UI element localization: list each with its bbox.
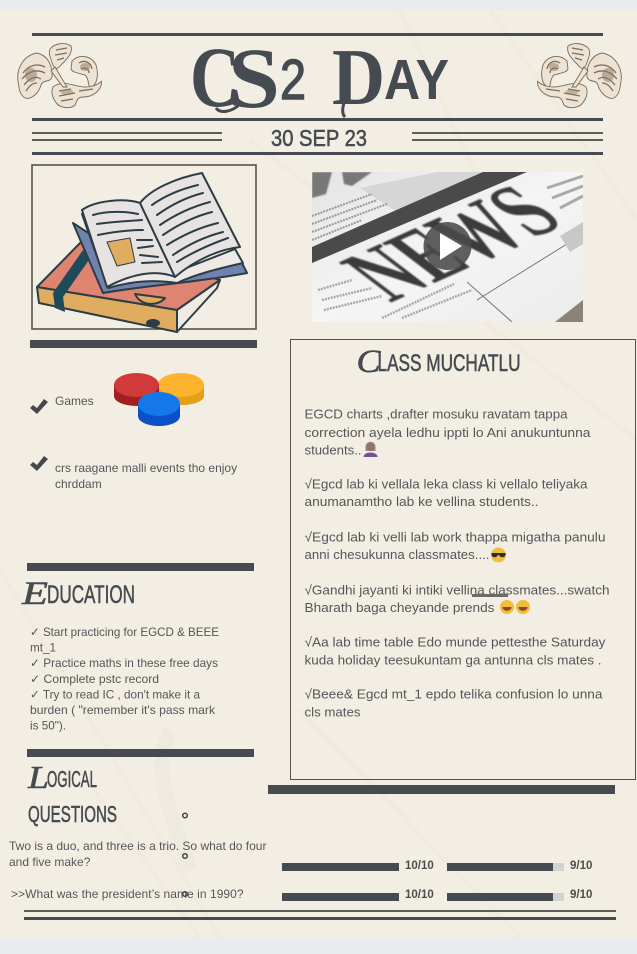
text: note 6: cls mates	[304, 704, 361, 720]
heading: logical questions	[27, 760, 117, 827]
text block: education: ✓ Start practicing for EGCD & BEEE	[30, 625, 219, 639]
text block: education	[30, 625, 219, 732]
footer rules	[24, 910, 616, 920]
text: note 4: √Gandhi jayanti ki intiki vellina classmates...swatch	[304, 582, 610, 598]
heading: education	[21, 576, 135, 612]
underline stroke	[472, 594, 508, 596]
section bar: scores	[268, 785, 615, 794]
text block: education: ✓ Try to read IC , don't make it a	[30, 688, 200, 702]
text block: education: ✓ Complete pstc record	[30, 672, 159, 686]
text: question one: and five make?	[9, 854, 90, 868]
score bar row 1 right	[447, 860, 592, 872]
text: note 5: √Aa lab time table Edo munde pettesthe Saturday	[304, 634, 606, 650]
text: note 4	[304, 582, 610, 615]
section bar: education	[27, 563, 254, 570]
icon: check	[30, 399, 48, 414]
text: note 1: students..	[304, 442, 362, 458]
text block: education: mt_1	[30, 640, 56, 654]
icon: game tokens	[114, 373, 204, 426]
score bar row 1 left	[282, 860, 434, 872]
heading: logical questions: L	[27, 760, 49, 795]
text: note 3: √Egcd lab ki velli lab work thappa migatha panulu	[304, 530, 606, 544]
icon: right ornament	[537, 43, 622, 108]
header rules	[32, 33, 603, 155]
score bar row 1 right: 9/10	[570, 860, 592, 872]
text: note 6	[304, 686, 603, 720]
illustration: news photo with play button: NEWS	[319, 172, 583, 317]
text: note 1	[304, 406, 591, 458]
heading: class muchatlu	[356, 344, 520, 380]
score bar row 1 left: 10/10	[405, 860, 434, 872]
title: 2	[280, 48, 306, 112]
text: events	[55, 461, 237, 491]
text block: education: ✓ Practice maths in these free days	[30, 656, 218, 670]
text: games: Games	[55, 394, 94, 408]
title: AY	[384, 48, 449, 112]
text: note 1: correction ayela ledhu ippti lo Ani anukuntunna	[304, 425, 591, 440]
icon: open book	[73, 173, 247, 293]
score chart	[282, 860, 592, 901]
title	[190, 40, 449, 120]
text: note 1: EGCD charts ,drafter mosuku ravatam tappa	[304, 406, 568, 422]
text: note 3	[304, 530, 606, 562]
section bar: games	[30, 340, 257, 348]
heading: education: E	[21, 576, 48, 612]
panel: class muchatlu	[290, 339, 636, 780]
text: note 3: anni chesukunna classmates....	[304, 547, 490, 562]
text block: education: is 50").	[30, 718, 66, 732]
checklist item: games	[30, 394, 94, 414]
score bar row 2 left: 10/10	[405, 889, 434, 901]
icon: left ornament	[17, 43, 102, 108]
text: question two: >>What was the president’s name in 1990?	[11, 887, 244, 901]
text: note 5: kuda holiday teesukuntam ga antunna cls mates .	[304, 652, 602, 668]
icon: person emoji	[364, 442, 378, 457]
icon: check	[30, 456, 48, 471]
text block: education: burden ( "remember it's pass mark	[30, 703, 216, 717]
score bar row 2 left	[282, 889, 434, 901]
text: note 4: Bharath baga cheyande prends	[304, 600, 495, 615]
text: events: chrddam	[55, 477, 102, 491]
section bar: logical questions	[27, 749, 254, 756]
icon: closed book	[37, 240, 220, 332]
score bar row 2 right	[447, 889, 592, 901]
text: note 2: anumanamtho lab ke vellina students..	[304, 494, 538, 509]
text: events: crs raagane malli events tho enjoy	[55, 461, 237, 475]
checklist item: events	[30, 456, 237, 491]
text: question one: Two is a duo, and three is a trio. So what do four	[9, 839, 266, 853]
decorative circles	[182, 812, 188, 897]
heading: class muchatlu: C	[356, 344, 382, 380]
text: note 2: √Egcd lab ki vellala leka class ki vellalo teliyaka	[304, 476, 588, 492]
icon: sunglasses emoji	[491, 548, 506, 562]
text: note 6: √Beee& Egcd mt_1 epdo telika confusion lo unna	[304, 686, 603, 702]
illustration: books panel	[31, 164, 257, 333]
text: note 2	[304, 476, 588, 509]
icon: laughing emojis	[500, 600, 530, 614]
score bar row 2 right: 9/10	[570, 889, 592, 901]
icon: play button	[424, 222, 472, 270]
text: question one	[9, 839, 266, 868]
text: note 5	[304, 634, 606, 668]
heading: class muchatlu: LASS MUCHATLU	[378, 350, 520, 377]
